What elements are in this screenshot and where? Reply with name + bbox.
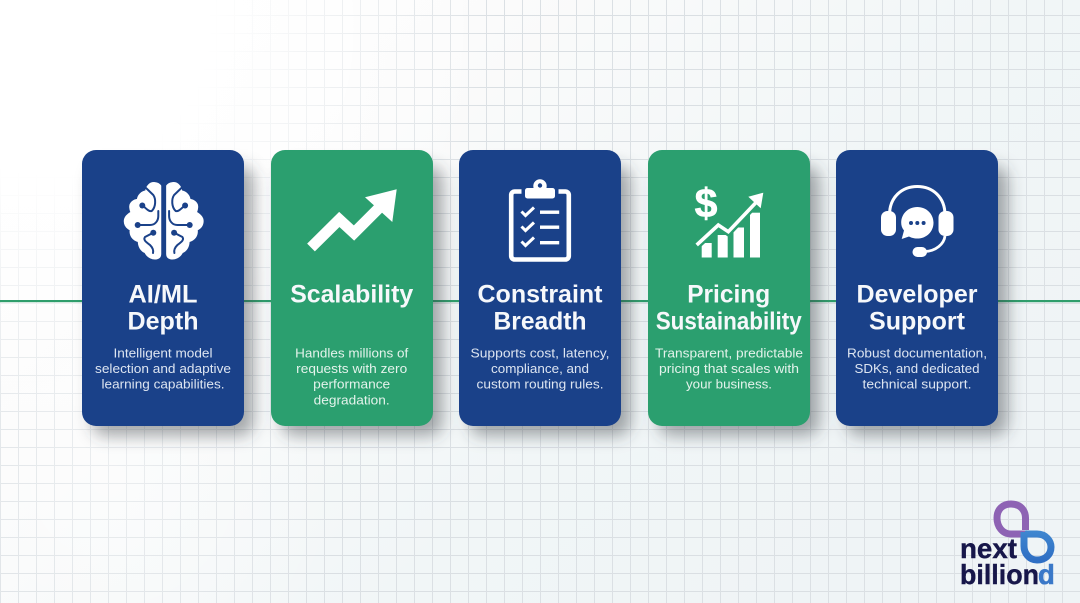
heading: AI/ML Depth: Depth (128, 307, 198, 335)
text: AI/ML description: selection and adaptive (95, 361, 231, 376)
connector line (0, 300, 1080, 302)
icon: dollar and growth chart (695, 180, 763, 258)
text: Developer description: SDKs, and dedicated (854, 361, 980, 376)
heading: Scalability: Scalability (290, 281, 413, 309)
logo: nextbillion (960, 504, 1055, 590)
panel: AI/ML Depth (82, 150, 244, 426)
text: Pricing description: pricing that scales with (659, 361, 799, 376)
card shadows (92, 166, 1008, 436)
panel: Developer Support (836, 150, 998, 426)
heading: Constraint Breadth: Constraint (478, 281, 603, 309)
text: Constraint description: custom routing rules. (476, 377, 604, 392)
text: Scalability description: Handles millions of (295, 345, 409, 360)
text: Developer description: Robust documentation, (847, 345, 987, 360)
heading: Constraint Breadth: Breadth (494, 307, 586, 335)
text: Pricing description (655, 345, 803, 392)
text: Developer description (847, 345, 987, 392)
text: Scalability description (295, 345, 409, 407)
icon: headset with chat bubble (881, 186, 954, 257)
text: Constraint description (470, 345, 610, 392)
text: Scalability description: degradation. (314, 392, 390, 407)
heading: Constraint Breadth (478, 281, 603, 335)
text: Developer description: technical support. (862, 377, 972, 392)
text: AI/ML description (95, 345, 231, 392)
logo: nextbillion: d (1038, 559, 1055, 590)
text: AI/ML description: learning capabilities. (102, 377, 224, 392)
icon: brain (125, 183, 202, 258)
text: Constraint description: Supports cost, latency, (470, 345, 610, 360)
logo: nextbillion: next (960, 533, 1017, 564)
heading: Pricing Sustainability: Sustainability (656, 307, 802, 335)
icon: clipboard checklist (511, 179, 569, 260)
panel: Pricing Sustainability (648, 150, 810, 426)
text: Scalability description: performance (313, 377, 390, 392)
text: Pricing description: Transparent, predictable (655, 345, 803, 360)
heading: AI/ML Depth: AI/ML (128, 281, 198, 309)
text: Scalability description: requests with zero (296, 361, 407, 376)
panel: Constraint Breadth (459, 150, 621, 426)
panel: Scalability (271, 150, 433, 426)
text: Constraint description: compliance, and (491, 361, 589, 376)
icon: rising arrow (311, 189, 397, 248)
heading: Pricing Sustainability: Pricing (687, 281, 770, 309)
icon: dollar and growth chart: $ (695, 180, 718, 226)
logo: nextbillion: billion (960, 559, 1039, 590)
heading: Developer Support: Support (869, 307, 966, 335)
heading: Developer Support (856, 281, 978, 335)
text: AI/ML description: Intelligent model (114, 345, 213, 360)
heading: Developer Support: Developer (856, 281, 978, 309)
heading: AI/ML Depth (128, 281, 198, 335)
text: Pricing description: your business. (686, 377, 772, 392)
heading: Pricing Sustainability (656, 281, 802, 335)
